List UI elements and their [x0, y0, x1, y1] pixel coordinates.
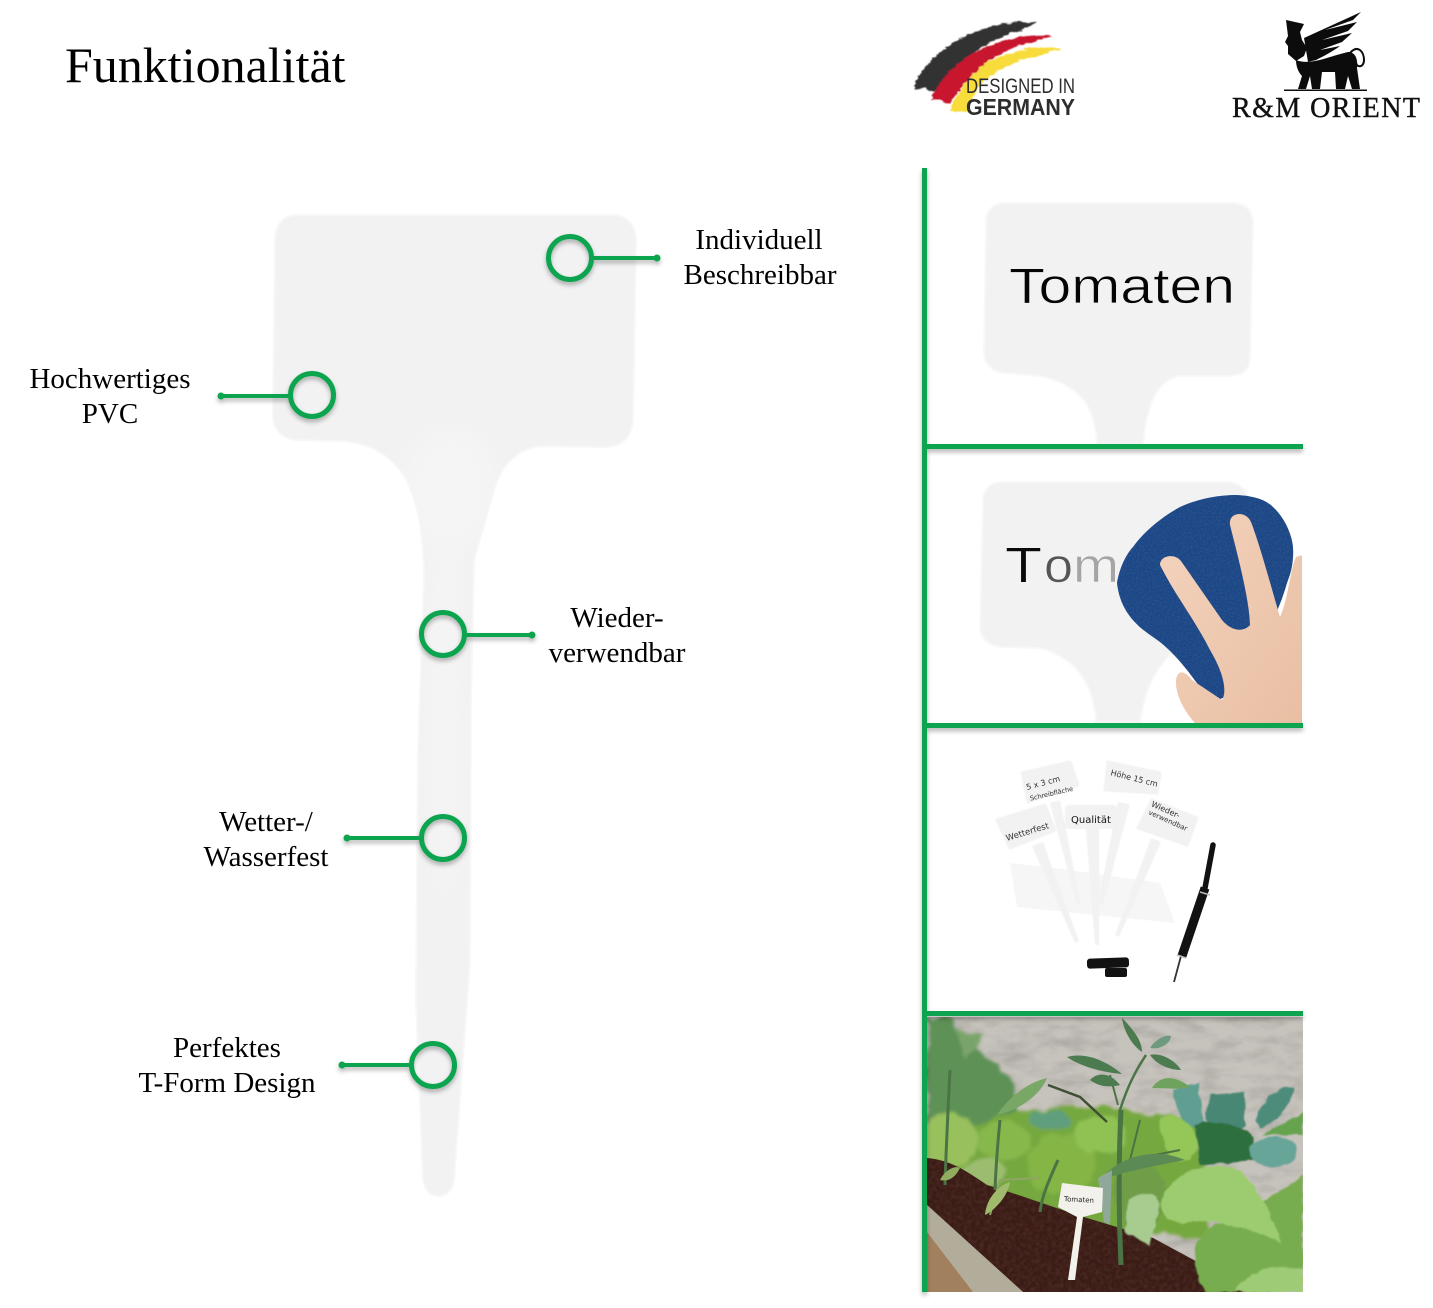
kale plants	[1160, 1082, 1303, 1167]
callout: Individuell Beschreibbar: Individuell	[695, 224, 823, 256]
erased handwritten word: m	[1073, 540, 1119, 593]
product bag	[1010, 863, 1175, 923]
label captions: Schreibfläche	[1029, 785, 1074, 803]
panel: product set	[997, 762, 1213, 982]
tomato seedlings	[945, 1055, 1180, 1265]
small plant label in soil	[1058, 1183, 1103, 1280]
logo: R&M Orient	[1232, 12, 1420, 124]
callout: Hochwertiges PVC: Hochwertiges	[29, 363, 191, 395]
callout: Wetter-/Wasserfest	[204, 806, 464, 873]
green frame: vertical bar and dividers	[922, 168, 1303, 1292]
label captions: Qualität	[1071, 815, 1111, 826]
icon: hand	[1160, 514, 1303, 723]
ground under edge	[927, 1232, 973, 1292]
callout: Perfektes T-Form Design: Perfektes	[173, 1032, 281, 1064]
callout: Wiederverwendbar	[422, 602, 686, 669]
logo: Designed in Germany	[914, 22, 1075, 120]
label captions: Höhe 15 cm	[1110, 768, 1159, 789]
icon: German flag brush strokes	[914, 22, 1062, 112]
label captions: verwendbar	[1147, 809, 1189, 833]
label captions: Wetterfest	[1005, 821, 1051, 844]
erased handwritten word	[1006, 548, 1115, 582]
callout: Wetter-/Wasserfest: Wetter-/	[219, 806, 314, 838]
panel: written label	[984, 203, 1253, 444]
background foliage	[922, 1017, 1210, 1240]
icon: blue sponge	[1117, 495, 1293, 702]
panel: wiping label with sponge	[980, 482, 1303, 723]
callout: Perfektes T-Form Design	[139, 1032, 454, 1099]
wall background	[927, 1017, 1303, 1292]
wooden edge	[927, 1205, 1023, 1292]
seedling leaves	[940, 1018, 1190, 1225]
lettuce leaves	[1125, 1166, 1303, 1292]
callout: Wiederverwendbar: Wieder-	[570, 602, 664, 634]
label caption: Tomaten	[1063, 1195, 1094, 1205]
callout: Hochwertiges PVC: PVC	[82, 398, 138, 430]
label captions	[1005, 768, 1189, 844]
callout: Wiederverwendbar: verwendbar	[549, 637, 686, 669]
T-shaped plant label illustration	[273, 215, 636, 1196]
label captions: Wieder-	[1150, 800, 1181, 820]
handwritten word: Tomaten	[1009, 258, 1235, 314]
callout: Wetter-/Wasserfest: Wasserfest	[204, 841, 328, 873]
erased handwritten word: o	[1044, 540, 1073, 593]
logo text: DESIGNED IN	[966, 75, 1075, 98]
label shape	[980, 482, 1248, 722]
title: Funktionalität	[65, 37, 346, 93]
icon: marker pen and caps	[1087, 845, 1213, 982]
label shape	[984, 203, 1253, 444]
callout: Perfektes T-Form Design: T-Form Design	[139, 1067, 316, 1099]
callout: Individuell Beschreibbar: Beschreibbar	[684, 259, 837, 291]
erased handwritten word: T	[1005, 537, 1042, 593]
panel: garden photo	[922, 1017, 1303, 1292]
icon: winged griffin	[1284, 12, 1367, 91]
callout: Individuell Beschreibbar	[548, 224, 837, 291]
soil	[927, 1158, 1270, 1292]
logo text: R&M ORIENT	[1232, 93, 1420, 124]
labels	[997, 762, 1197, 945]
logo: Designed in Germany: GERMANY	[966, 94, 1075, 120]
callout: Hochwertiges PVC	[29, 363, 334, 430]
label captions: 5 x 3 cm	[1025, 774, 1061, 792]
